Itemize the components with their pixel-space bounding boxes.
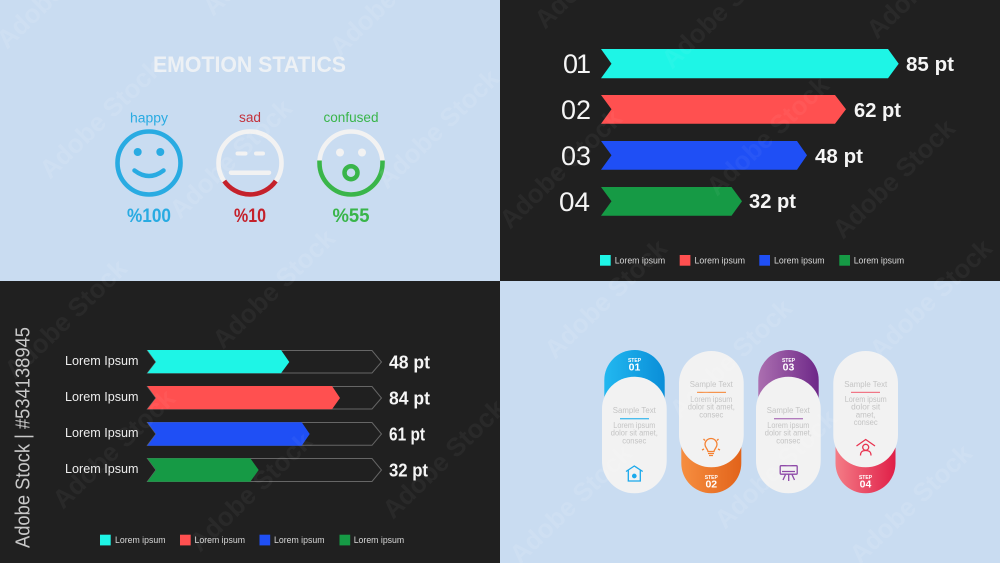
watermark: Adobe Stock bbox=[538, 233, 673, 364]
step 03: consec bbox=[776, 436, 800, 446]
stock id vertical text: Adobe Stock | #534138945 bbox=[12, 327, 34, 548]
watermark: Adobe Stock bbox=[376, 393, 511, 524]
step 04: consec bbox=[854, 418, 878, 427]
row 1 bbox=[65, 350, 430, 373]
watermark: Adobe Stock bbox=[206, 223, 341, 354]
emotion: confused: %55 bbox=[332, 206, 370, 227]
watermark: Adobe Stock bbox=[493, 103, 628, 234]
watermark: Adobe Stock bbox=[0, 253, 133, 384]
icon: person under roof bbox=[856, 440, 875, 456]
legend: Lorem ipsum bbox=[854, 256, 904, 266]
row 1: Lorem Ipsum bbox=[65, 353, 138, 368]
step 03: Sample Text bbox=[767, 406, 811, 415]
watermark: Adobe Stock bbox=[206, 223, 341, 354]
row 03 bbox=[561, 141, 863, 171]
row 4: Lorem Ipsum bbox=[65, 461, 138, 476]
legend: Lorem ipsum bbox=[774, 256, 825, 266]
step 02: Lorem ipsum bbox=[690, 395, 733, 404]
row 04: 04 bbox=[559, 187, 590, 217]
watermark: Adobe Stock bbox=[663, 293, 798, 424]
row 4 bbox=[65, 458, 428, 482]
row 2: 84 pt bbox=[389, 388, 430, 408]
row 02: 02 bbox=[561, 95, 591, 125]
legend bbox=[100, 535, 404, 546]
step 02: 02 bbox=[705, 478, 717, 490]
step 04: 04 bbox=[860, 478, 871, 490]
emotion: sad: sad bbox=[239, 110, 261, 125]
row 01: 01 bbox=[563, 49, 591, 79]
step 02: consec bbox=[699, 410, 723, 420]
row 1: 48 pt bbox=[389, 352, 430, 372]
icon: house bbox=[626, 466, 643, 481]
step 01: Lorem ipsum bbox=[613, 421, 656, 430]
watermark: Adobe Stock bbox=[700, 70, 835, 201]
row 3: 61 pt bbox=[389, 424, 425, 444]
emotion: confused bbox=[320, 110, 382, 227]
row 03: 03 bbox=[561, 141, 591, 171]
step 03: 03 bbox=[783, 362, 794, 374]
watermark: Adobe Stock bbox=[863, 233, 998, 364]
emotion: sad bbox=[218, 110, 282, 227]
step 03: dolor sit amet, bbox=[765, 429, 812, 438]
step 01: dolor sit amet, bbox=[611, 429, 658, 438]
emotion: happy bbox=[118, 110, 180, 227]
panel: emotion statistics bbox=[0, 0, 500, 281]
row 4: 32 pt bbox=[389, 460, 428, 480]
step 03: Lorem ipsum bbox=[767, 421, 810, 430]
step 02: Sample Text bbox=[690, 380, 734, 389]
step 04: Sample Text bbox=[844, 380, 888, 389]
step 03: STEP bbox=[782, 358, 796, 364]
step 04 bbox=[833, 351, 898, 493]
step 03 bbox=[756, 350, 821, 493]
emotion: happy: happy bbox=[130, 110, 168, 126]
row 2 bbox=[65, 386, 430, 409]
watermark: Adobe Stock bbox=[708, 403, 843, 534]
watermark: Adobe Stock bbox=[46, 383, 181, 514]
panel: numbered arrow bars bbox=[500, 0, 1000, 281]
row 03: 48 pt bbox=[815, 146, 863, 168]
step 04: STEP bbox=[859, 475, 873, 481]
row 02: 62 pt bbox=[854, 100, 901, 122]
legend: Lorem ipsum bbox=[694, 256, 745, 266]
emotion: happy: %100 bbox=[127, 206, 171, 227]
icon: light bulb bbox=[702, 438, 720, 456]
emotion: confused: confused bbox=[324, 110, 378, 125]
panel: progress arrow bars bbox=[0, 281, 500, 563]
step 02 bbox=[679, 351, 744, 493]
row 02 bbox=[561, 95, 901, 125]
step 01: consec bbox=[622, 436, 646, 446]
step 04: amet, bbox=[856, 410, 876, 420]
step 01: 01 bbox=[629, 362, 640, 374]
step 04: dolor sit bbox=[851, 403, 881, 412]
step 04: Lorem ipsum bbox=[845, 395, 887, 404]
watermark: Adobe Stock bbox=[33, 53, 168, 184]
watermark: Adobe Stock bbox=[863, 233, 998, 364]
watermark: Adobe Stock bbox=[538, 233, 673, 364]
legend: Lorem ipsum bbox=[354, 535, 404, 546]
row 2: Lorem Ipsum bbox=[65, 389, 138, 404]
row 01 bbox=[563, 49, 954, 79]
row 04 bbox=[559, 187, 796, 217]
emotion: sad: %10 bbox=[234, 206, 266, 227]
step 02: dolor sit amet, bbox=[688, 403, 735, 412]
watermark: Adobe Stock bbox=[0, 253, 133, 384]
step 01 bbox=[602, 350, 667, 493]
watermark: Adobe Stock bbox=[183, 426, 318, 557]
watermark: Adobe Stock bbox=[826, 113, 961, 244]
title: EMOTION STATICS bbox=[153, 52, 346, 77]
row 3 bbox=[65, 422, 425, 446]
step 01: STEP bbox=[628, 358, 642, 364]
legend: Lorem ipsum bbox=[115, 535, 166, 546]
legend bbox=[600, 255, 904, 266]
row 01: 85 pt bbox=[906, 54, 954, 76]
step 02: STEP bbox=[705, 475, 718, 481]
watermark: Adobe Stock bbox=[370, 63, 505, 194]
row 3: Lorem Ipsum bbox=[65, 425, 138, 440]
legend: Lorem ipsum bbox=[274, 535, 325, 546]
watermark: Adobe Stock bbox=[163, 93, 298, 224]
legend: Lorem ipsum bbox=[615, 256, 665, 266]
row 04: 32 pt bbox=[749, 191, 796, 213]
legend: Lorem ipsum bbox=[194, 535, 245, 546]
panel: four step capsules bbox=[500, 281, 1000, 563]
step 01: Sample Text bbox=[613, 406, 657, 415]
icon: air conditioner bbox=[780, 466, 797, 481]
